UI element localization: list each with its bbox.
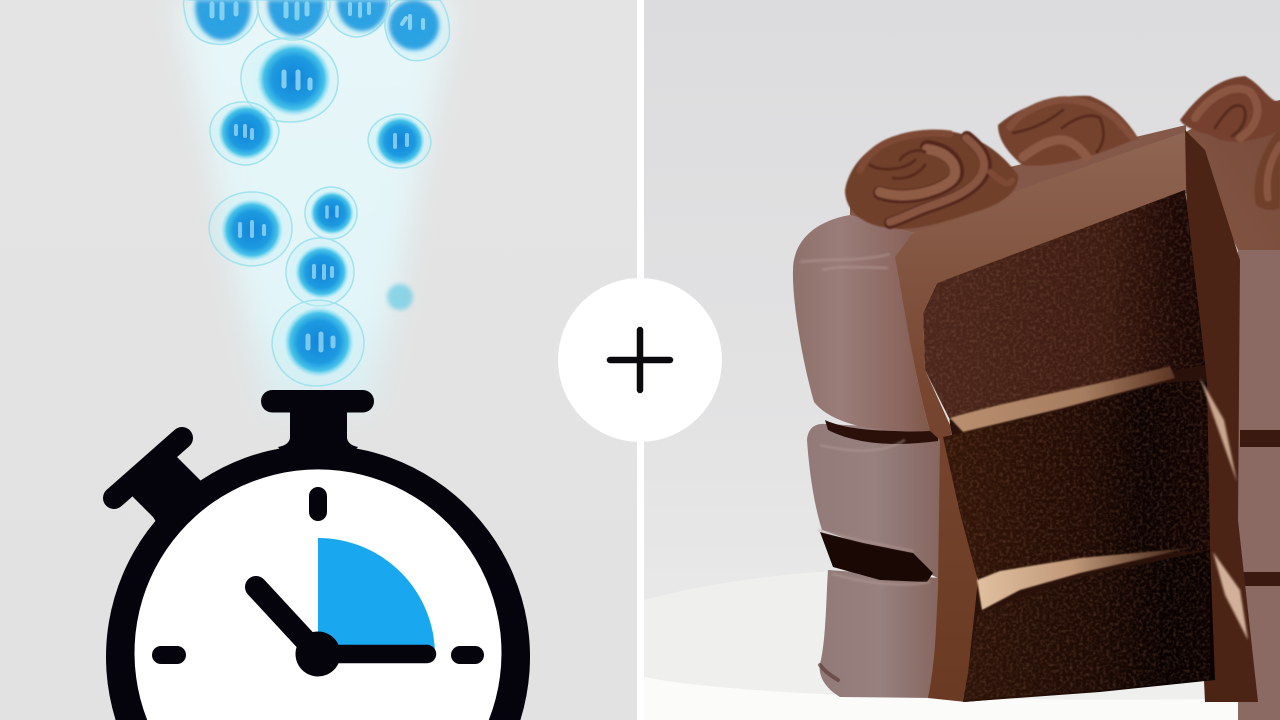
icon: stopwatch: [106, 390, 530, 720]
tick marks: [152, 487, 484, 664]
bubble: [210, 102, 279, 165]
clock hands: [256, 587, 427, 654]
gap between mid and bottom layers: [820, 532, 933, 582]
panel: right background: [640, 0, 1280, 720]
far frosted side: [1238, 250, 1280, 720]
bubble: [286, 238, 354, 306]
gap between top and mid layers: [825, 420, 938, 444]
bubble: [241, 38, 338, 122]
frosting highlights: [800, 254, 930, 584]
rosette: left: [845, 130, 1018, 229]
icon: plus sign: [610, 330, 670, 390]
cream filling: lower: [977, 548, 1190, 610]
bubble: [209, 192, 292, 266]
watch case: [106, 445, 530, 720]
plus badge: [558, 278, 722, 442]
cream filling: angled side upper: [1200, 378, 1237, 482]
side button: [114, 438, 240, 560]
bubble: [385, 0, 450, 61]
cake slice angled side: [1185, 130, 1258, 702]
middle layer frosting side: [807, 424, 942, 580]
rosette: right: [1180, 76, 1280, 142]
watch face: [134, 469, 502, 720]
cream filling: upper: [950, 366, 1175, 432]
light beam rising from stopwatch: [175, 0, 455, 410]
crown button: [261, 390, 374, 455]
rosette: far right partial: [1254, 127, 1280, 210]
crumb: top layer: [923, 190, 1205, 420]
bottom layer frosting side: [820, 570, 940, 698]
bubble: [272, 300, 364, 386]
crumb: middle layer: [943, 380, 1210, 577]
panel: left background: [0, 0, 640, 720]
rosette: middle: [998, 96, 1138, 166]
bubbles: oxygen molecules: [183, 0, 450, 386]
plate surface: [644, 571, 1280, 700]
plate rim: [644, 677, 1280, 720]
far cake section: [1186, 100, 1280, 720]
plate: [644, 571, 1280, 720]
bubble: [368, 114, 431, 168]
bubble: small faded: [387, 284, 413, 310]
far dark gaps: [1240, 430, 1280, 586]
crumb: bottom layer: [963, 550, 1215, 702]
frosting drip at base: [820, 665, 838, 680]
badge circle: [558, 278, 722, 442]
bubble: [305, 187, 357, 239]
top layer frosting side: [793, 215, 930, 432]
illustration: chocolate cake: [793, 76, 1280, 720]
vertical divider line: [637, 0, 644, 720]
bubble: [183, 0, 258, 44]
crumb texture: [920, 185, 1215, 705]
blue quarter wedge: [318, 538, 435, 655]
bubble: [257, 0, 330, 40]
top frosting surface: [850, 125, 1186, 233]
bubble: [326, 0, 390, 37]
cream filling: angled side lower: [1213, 552, 1248, 640]
cake face backing: [940, 190, 1212, 702]
far top surface: [1186, 100, 1280, 260]
cut frosting band: [895, 132, 1190, 702]
hub: [296, 632, 340, 676]
